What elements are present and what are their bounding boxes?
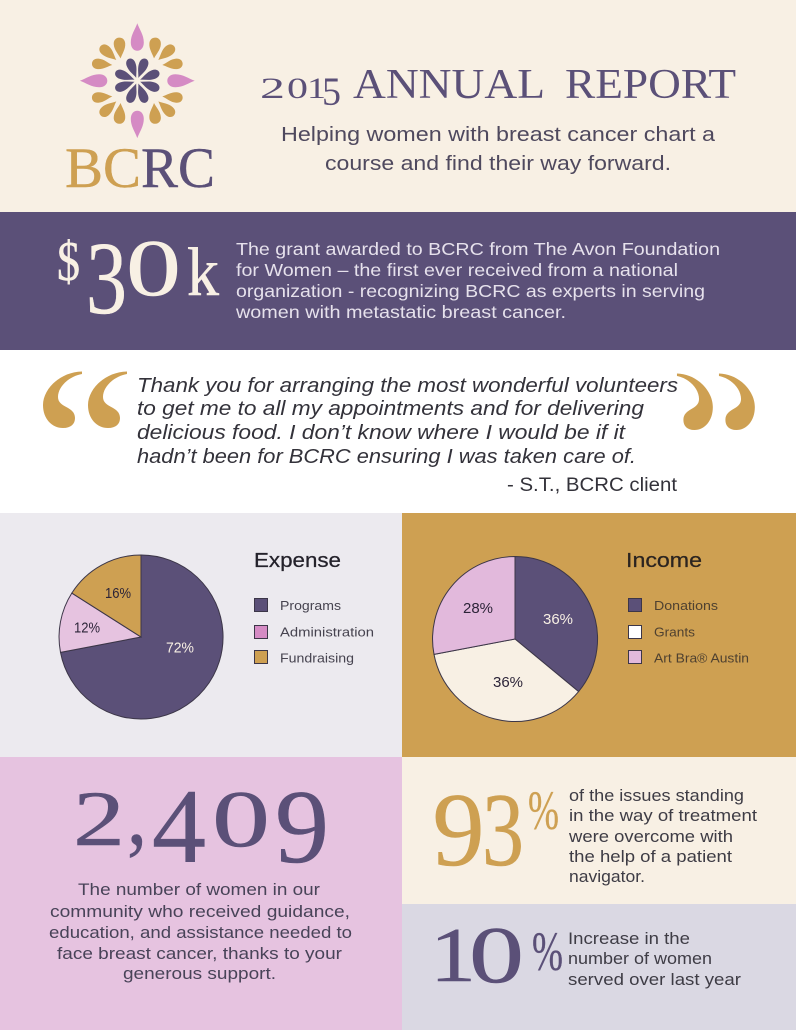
grant description: [235, 239, 720, 322]
big stat: 2,409: 2: [73, 775, 125, 862]
big stat: 93%: %: [528, 780, 559, 841]
subtitle: Helping women with breast cancer chart a: [281, 124, 716, 146]
big stat: $30k: $: [57, 231, 80, 293]
navigator description: the help of a patient: [569, 848, 732, 866]
big stat: 93%: [432, 771, 559, 888]
logo wordmark: [65, 137, 215, 200]
title: 0: [287, 72, 308, 105]
panel: growth: [402, 904, 796, 1030]
quote text: Thank you for arranging the most wonderful volunteers: [137, 375, 678, 397]
growth description: Increase in the: [568, 930, 690, 948]
panel: client quote: [0, 350, 796, 513]
logo wordmark: BC: [65, 137, 141, 200]
big stat: 2,409: 4: [152, 768, 206, 885]
panel: expense: [0, 513, 402, 757]
quote text: to get me to all my appointments and for delivering: [137, 398, 644, 420]
legend: income: Grants: [654, 624, 696, 640]
quote text: hadn’t been for BCRC ensuring I was taken care of.: [137, 446, 636, 468]
panel: women served: [0, 757, 402, 1030]
navigator description: of the issues standing: [569, 787, 744, 805]
growth description: number of women: [568, 950, 712, 968]
big stat: 10%: %: [532, 921, 563, 982]
legend: expense: Administration: [280, 624, 374, 640]
title: REPORT: [565, 62, 736, 108]
panel: grant banner: [0, 212, 796, 350]
title: 1: [307, 72, 326, 105]
legend: income: Donations: [654, 598, 719, 613]
navigator description: were overcome with: [568, 828, 733, 846]
big stat: 2,409: [73, 765, 329, 885]
big stat: $30k: 3: [86, 221, 127, 336]
heading: expense: Expense: [254, 550, 341, 572]
title: 5: [322, 69, 341, 114]
big stat: 10%: [430, 912, 563, 1000]
women served description: [49, 881, 352, 983]
grant description: for Women – the first ever received from a national: [236, 260, 678, 280]
big stat: 10%: 0: [469, 912, 524, 1000]
title: [260, 62, 736, 114]
big stat: $30k: k: [187, 234, 219, 310]
pie chart: expense: 72%: [166, 640, 194, 656]
legend: expense: Fundraising: [280, 650, 354, 666]
pie chart: income: 28%: [463, 601, 493, 617]
big stat: 2,409: 0: [212, 776, 270, 864]
women served description: education, and assistance needed to: [49, 924, 352, 942]
big stat: 10%: 1: [430, 912, 476, 998]
big stat: $30k: 0: [126, 225, 181, 313]
panel: patient navigator: [402, 757, 796, 904]
legend: expense: [254, 598, 374, 666]
icon: opening quote marks: [43, 372, 127, 428]
navigator description: in the way of treatment: [569, 807, 757, 825]
icon: closing quote marks: [677, 374, 755, 430]
grant description: organization - recognizing BCRC as experts in serving: [236, 281, 705, 301]
growth description: [568, 930, 742, 989]
icon: BCRC flower logo: [80, 23, 195, 138]
heading: income: Income: [626, 550, 702, 572]
pie chart: expense: [59, 555, 223, 719]
legend: expense: Programs: [280, 598, 342, 613]
title: ANNUAL: [353, 62, 545, 108]
women served description: community who received guidance,: [50, 903, 350, 921]
women served description: generous support.: [123, 965, 276, 983]
subtitle: [281, 124, 716, 175]
big stat: 93%: 3: [482, 771, 524, 888]
panel: income: [402, 513, 796, 757]
big stat: 2,409: 9: [275, 768, 329, 885]
quote text: delicious food. I don’t know where I would be if it: [137, 422, 627, 444]
title: 2: [260, 72, 285, 105]
big stat: 2,409: ,: [127, 765, 147, 864]
pie chart: income: 36%: [493, 675, 523, 691]
pie chart: income: [433, 556, 598, 721]
pie chart: expense: 16%: [105, 586, 131, 602]
growth description: served over last year: [568, 971, 742, 989]
grant description: women with metastatic breast cancer.: [235, 302, 566, 322]
pie chart: income: 36%: [543, 612, 573, 628]
quote attribution: - S.T., BCRC client: [507, 474, 678, 496]
panel: header: [0, 0, 796, 212]
women served description: The number of women in our: [78, 881, 321, 899]
logo wordmark: RC: [141, 137, 215, 200]
big stat: 93%: 9: [432, 771, 484, 888]
quote text: [137, 375, 678, 468]
subtitle: course and find their way forward.: [325, 153, 671, 175]
navigator description: [568, 787, 757, 886]
grant description: The grant awarded to BCRC from The Avon Foundation: [236, 239, 720, 259]
navigator description: navigator.: [569, 868, 645, 886]
pie chart: expense: 12%: [74, 620, 100, 636]
women served description: face breast cancer, thanks to your: [57, 945, 343, 963]
legend: income: Art Bra® Austin: [654, 650, 749, 666]
big stat: $30k: [57, 221, 219, 336]
legend: income: [628, 598, 749, 666]
